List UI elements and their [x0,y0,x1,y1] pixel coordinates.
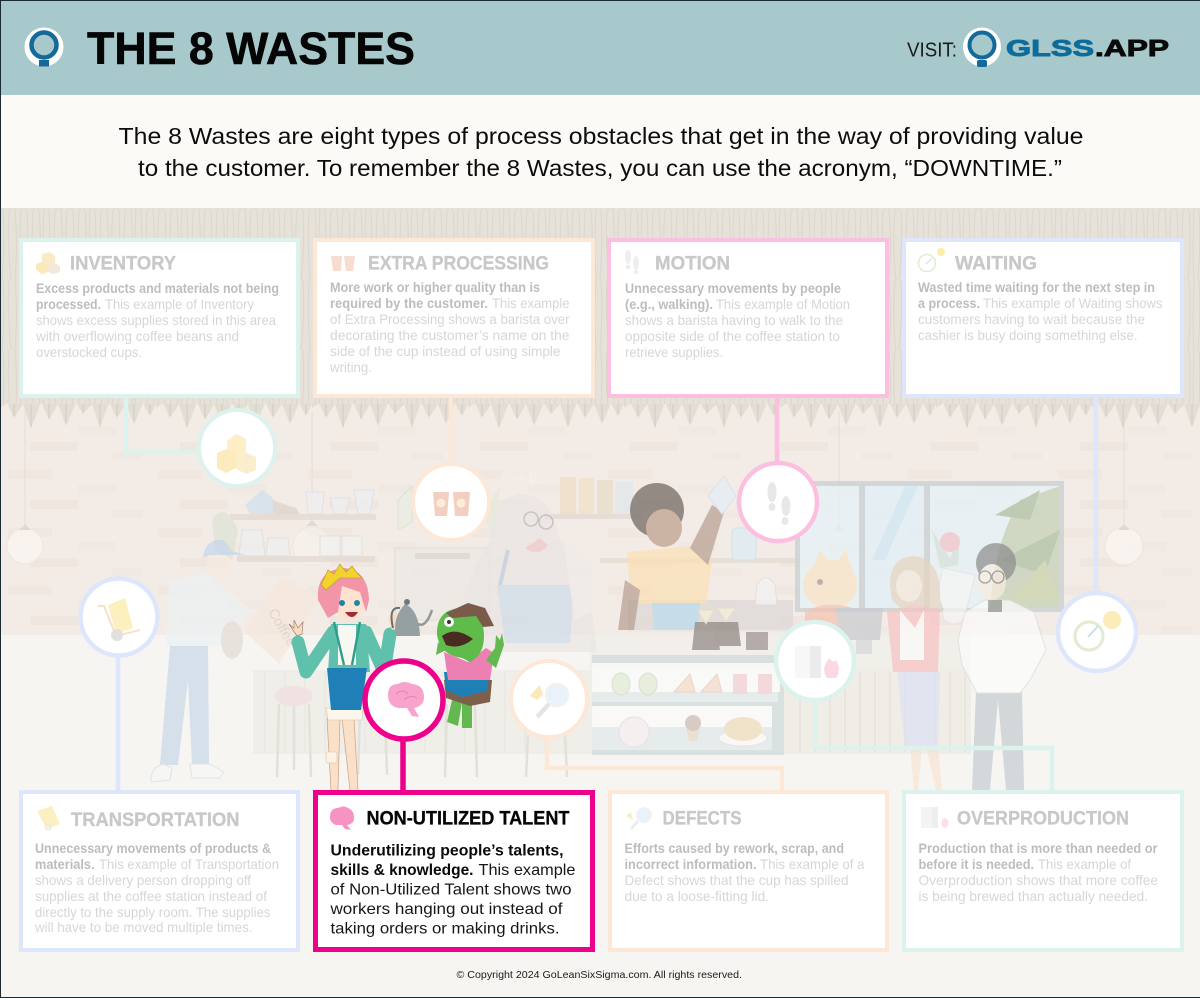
extra processing circle icon [413,464,489,540]
panel: non-utilized talent: Underutilizing people’s talents, [330,842,564,860]
panel: overproduction: Production that is more than needed or [918,840,1158,856]
panel: transportation [21,792,298,950]
panel: transportation: Unnecessary movements of products & [35,840,271,856]
icon: hand truck [37,806,60,830]
icon: clock and speech bubble [918,248,945,272]
panel: extra processing: EXTRA PROCESSING [368,254,549,274]
panel: defects: Efforts caused by rework, scrap, and [624,840,844,856]
panel: defects [610,792,887,950]
panel: inventory: This example of Inventory [105,296,254,312]
panel: motion: This example of Motion [716,296,850,312]
waiting circle icon [1058,593,1136,671]
delivery person with coffee sack: Coffee [265,606,300,649]
panel: waiting: a process. [918,295,980,311]
panel: overproduction: This example of [1038,856,1131,872]
panel: extra processing: This example [492,295,570,311]
panel: extra processing: side of the cup instead of using simple [330,343,561,359]
panel: non-utilized talent: of Non-Utilized Talent shows two [330,882,572,898]
intro text [0,95,1200,208]
panel: motion: retrieve supplies. [625,344,723,360]
panel: inventory: overstocked cups. [36,344,142,360]
pendant lamps [7,412,1143,565]
intro text: to the customer. To remember the 8 Wastes, you can use the acronym, “DOWNTIME.” [138,155,1062,181]
panel: overproduction: Overproduction shows that more coffee [918,872,1158,888]
foreground worker: frog in pink shirt [436,603,504,728]
visit link [907,28,1169,67]
connector: extra processing [449,398,453,464]
visit link: .APP [1095,35,1169,61]
panel: non-utilized talent: workers hanging out instead of [329,901,563,918]
icon: two cups [331,256,355,271]
coffee shop backdrop [0,208,1200,998]
transportation circle icon [80,578,158,656]
motion circle icon [739,463,817,541]
icon: brain [330,806,354,830]
intro text: The 8 Wastes are eight types of process obstacles that get in the way of providing value [118,123,1084,149]
panel: extra processing [315,240,593,396]
panel: defects: due to a loose-fitting lid. [624,888,769,904]
panel: extra processing: of Extra Processing shows a barista over [330,311,570,327]
panel: defects: incorrect information. [624,856,756,872]
counter and stools [253,630,971,777]
panel: non-utilized talent: taking orders or making drinks. [330,920,560,938]
visit link: VISIT: [907,40,957,62]
fox cashier and register [803,550,883,654]
panel: inventory: processed. [36,296,101,312]
panel: transportation: supplies at the coffee station instead of [35,888,267,904]
panel: waiting: WAITING [955,254,1037,274]
panel: transportation: directly to the supply room. The supplies [35,904,270,920]
panel: motion: MOTION [655,254,730,274]
panel: defects: Defect shows that the cup has spilled [624,872,848,888]
connector: transportation [116,656,120,790]
panel: waiting: customers having to wait because the [918,311,1145,327]
window with plants [795,481,1064,612]
copyright footer: © Copyright 2024 GoLeanSixSigma.com. All rights reserved. [456,969,742,981]
panel: motion: opposite side of the coffee station to [625,328,840,344]
panel: transportation: will have to be moved multiple times. [34,919,252,935]
title: THE 8 WASTES [87,23,415,74]
panel: transportation: materials. [35,856,94,872]
panel: defects: DEFECTS [662,808,742,830]
panel: defects: This example of a [760,856,865,872]
panel: overproduction [904,792,1182,950]
panel: non-utilized talent: This example [478,862,576,879]
panel: inventory: Excess products and materials not being [36,280,279,296]
connector: non-utilized talent [400,741,406,791]
panel: inventory: INVENTORY [70,254,176,274]
panel: overproduction: OVERPRODUCTION [957,808,1129,830]
panel: inventory [21,240,298,396]
man with glasses [958,543,1046,790]
panel: extra processing: required by the customer. [330,295,488,311]
barista with afro [618,476,736,630]
panel: motion: shows a barista having to walk to the [625,312,843,328]
logo icon: light bulb [24,28,64,66]
panel: transportation: TRANSPORTATION [71,810,240,831]
panel: motion: (e.g., walking). [625,296,713,312]
panel: motion [609,240,887,396]
panel: transportation: shows a delivery person dropping off [35,872,251,888]
connector: defects [547,736,782,790]
panel: overproduction: is being brewed than actually needed. [918,888,1148,904]
panel: inventory: with overflowing coffee beans and [35,328,239,344]
foreground worker: girl with kettle [289,564,432,790]
panel: overproduction: before it is needed. [918,856,1034,872]
connector: waiting [1094,398,1098,594]
overproduction circle icon [776,622,854,700]
connector: overproduction [815,700,1052,790]
pastry display case [592,655,784,755]
panel: extra processing: More work or higher quality than is [330,279,540,295]
icon: magnifier [626,808,651,829]
icon: footprints [625,250,639,274]
seal barista in overalls [456,473,596,652]
panel: inventory: shows excess supplies stored in this area [36,312,276,328]
panel: waiting [904,240,1182,396]
connector: motion [775,398,779,464]
panel: extra processing: writing. [329,359,372,375]
non-utilized talent circle icon: brain [365,661,443,739]
panel: non-utilized talent: skills & knowledge. [330,862,474,879]
panel: waiting: This example of Waiting shows [983,295,1162,311]
panel: motion: Unnecessary movements by people [625,280,841,296]
icon: inventory cubes [36,252,60,274]
woman customer and vase [887,530,975,790]
connector: inventory [126,398,200,452]
inventory circle icon [199,410,275,486]
panel: waiting: Wasted time waiting for the next step in [918,279,1155,295]
panel: waiting: cashier is busy doing something else. [918,327,1138,343]
panel: extra processing: decorating the customer’s name on the [330,327,570,343]
visit link: GLSS [1006,35,1094,61]
icon: cups and flame [921,807,948,828]
panel: transportation: This example of Transportation [99,856,279,872]
header band [0,0,1200,95]
shelves with supplies [212,477,795,632]
coffee pots on counter [692,578,777,650]
defects circle icon [511,661,587,737]
panel: non-utilized talent: NON-UTILIZED TALENT [366,808,570,830]
panel: non-utilized talent [316,792,592,950]
delivery person with coffee sack [151,540,320,782]
